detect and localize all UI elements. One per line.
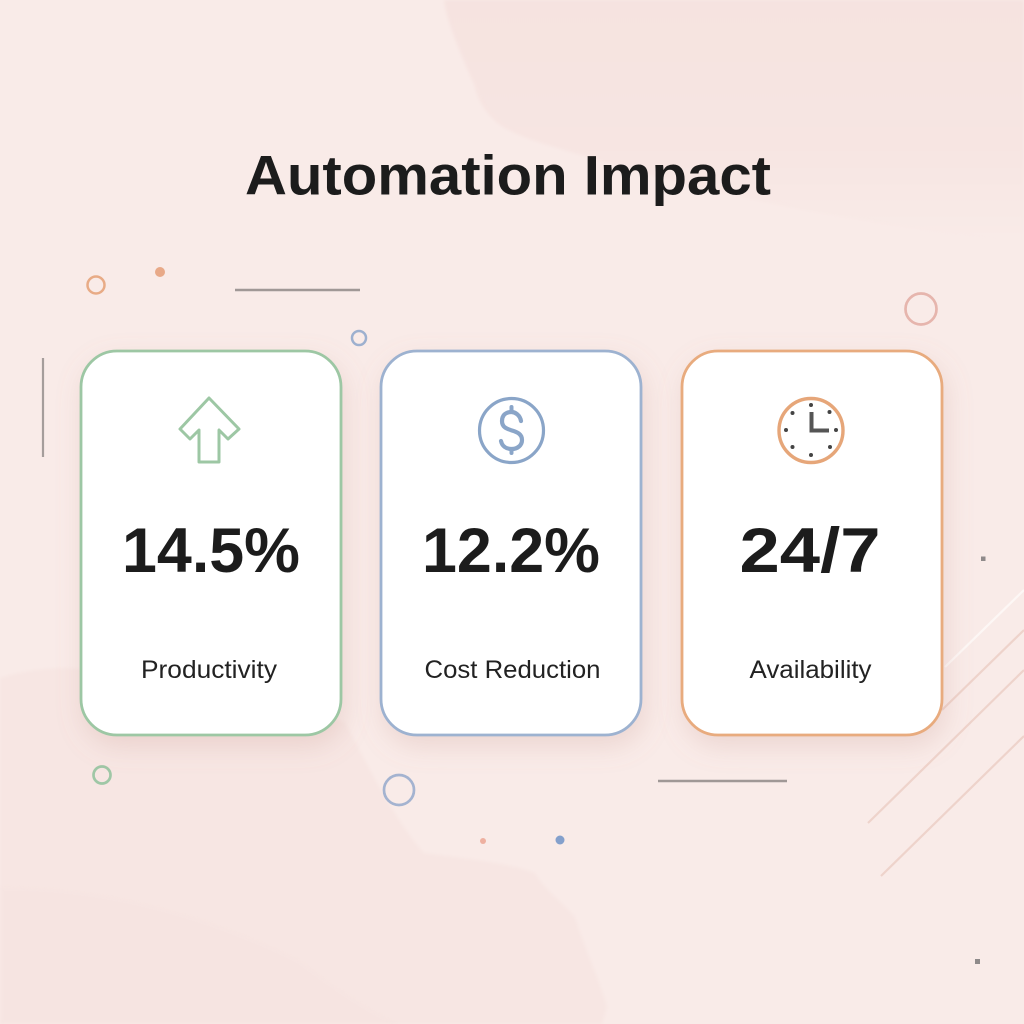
card: cost reduction <box>381 351 641 735</box>
icon: dollar coin <box>480 398 544 462</box>
card: availability <box>682 351 942 735</box>
decorative circles, dots and lines <box>43 267 1024 964</box>
icon: up arrow <box>180 398 239 462</box>
icon: clock <box>779 398 843 462</box>
value: 12.2%: 12.2% <box>422 516 600 586</box>
card: productivity <box>81 351 341 735</box>
title: Automation Impact <box>245 144 771 206</box>
label: cost reduction: Cost Reduction <box>424 656 600 684</box>
value: 14.5%: 14.5% <box>122 516 300 586</box>
panel: cost reduction <box>381 351 641 735</box>
label: availability: Availability <box>750 656 872 684</box>
label: productivity: Productivity <box>141 656 278 684</box>
value: 24/7: 24/7 <box>740 516 880 586</box>
panel: productivity <box>81 351 341 735</box>
panel: availability <box>682 351 942 735</box>
